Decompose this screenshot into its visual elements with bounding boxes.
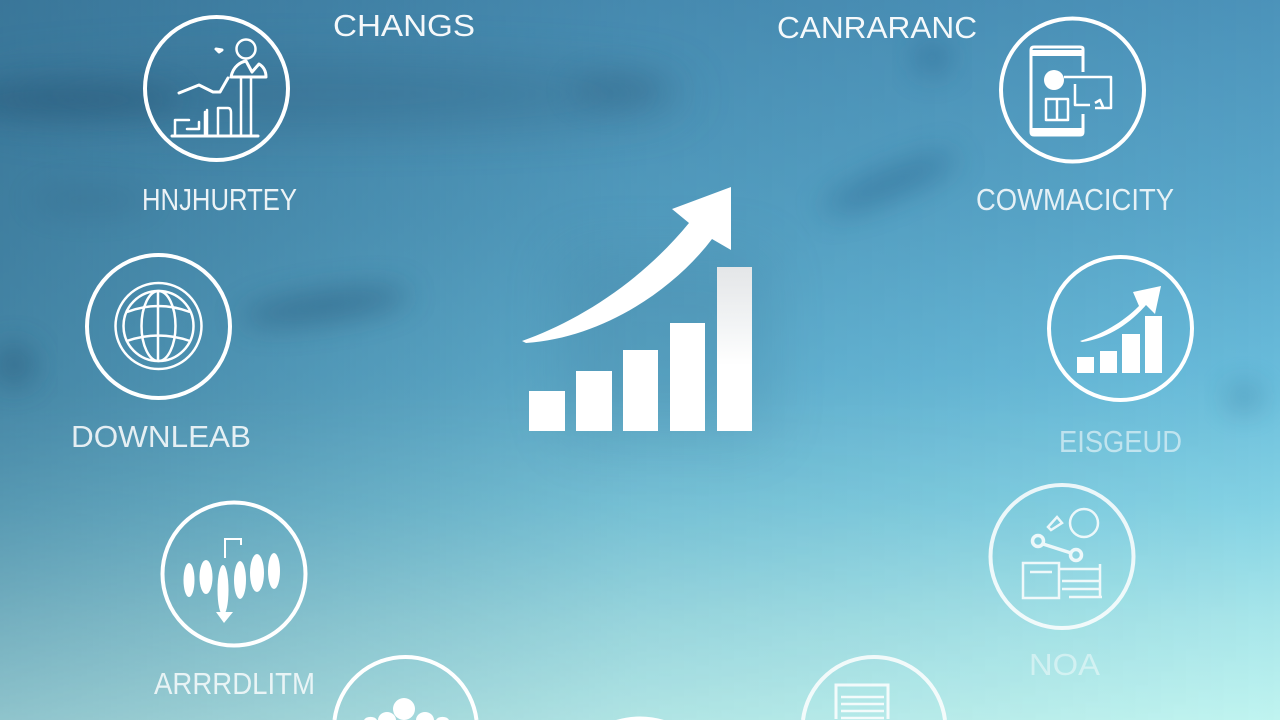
node: lower-right circle with connected nodes	[990, 485, 1134, 628]
node: bottom-right cropped circle	[803, 657, 945, 720]
icon: cluster of dots	[364, 698, 449, 720]
central chart: rising bars with arrow	[522, 187, 770, 440]
label: ARRRDLITM: ARRRDLITM	[154, 666, 315, 701]
heading: CHANGS: CHANGS	[333, 8, 475, 43]
icon: globe	[116, 283, 202, 369]
node: right circle with growth chart	[1049, 257, 1192, 400]
icon: column shapes with arrow	[184, 539, 280, 623]
node: lower-left circle with columns	[162, 502, 306, 646]
label: DOWNLEAB: DOWNLEAB	[71, 419, 251, 454]
node: bottom-centre cropped circle	[616, 716, 664, 720]
bar 4	[670, 323, 705, 431]
bar 2	[576, 371, 612, 431]
growth arrow	[522, 187, 731, 343]
icon: document	[836, 685, 888, 719]
label: NOA: NOA	[1029, 647, 1100, 682]
bar 1	[529, 391, 565, 431]
node: bottom-left cropped circle	[334, 657, 476, 720]
node: left circle with globe	[87, 255, 230, 398]
icon: person and bars	[172, 40, 266, 136]
icon: nodes and tables	[1023, 509, 1102, 598]
node: top-left circle with person on chart	[145, 17, 288, 160]
icon: phone and cards	[1031, 47, 1111, 135]
label: EISGEUD: EISGEUD	[1059, 424, 1182, 459]
icon: mini bars and arrow	[1077, 286, 1162, 373]
label: COWMACICITY: COWMACICITY	[976, 182, 1174, 217]
heading: CANRARANC: CANRARANC	[777, 10, 977, 45]
node: top-right circle with phone	[1001, 18, 1144, 162]
bar 3	[623, 350, 658, 431]
bar 5	[717, 267, 752, 431]
label: HNJHURTEY: HNJHURTEY	[142, 182, 297, 217]
